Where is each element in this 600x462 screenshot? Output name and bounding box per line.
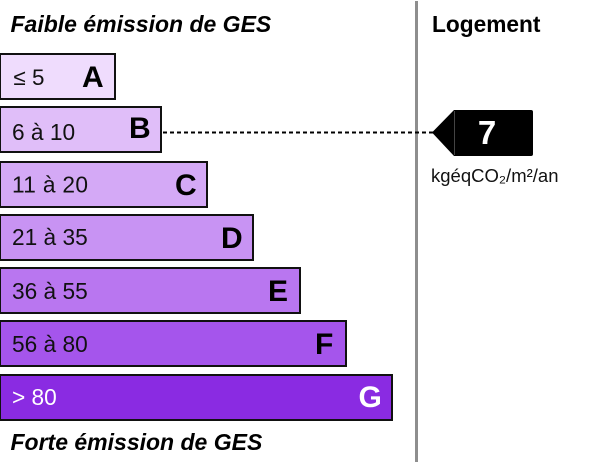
bar B: 6 à 10: [12, 119, 75, 145]
heading: high emissions: Forte émission de GES: [10, 429, 263, 455]
bar E: 36 à 55: [12, 278, 88, 304]
vertical divider: [415, 1, 418, 462]
bar D: D: [221, 222, 243, 255]
value arrow tag: 7: [478, 114, 496, 151]
bar C: C: [175, 169, 197, 202]
bar G: G: [358, 381, 382, 414]
bar A: [0, 54, 115, 99]
bar F: 56 à 80: [12, 331, 88, 357]
heading: housing: Logement: [432, 11, 541, 37]
value arrow tag: [432, 110, 533, 156]
bar D: 21 à 35: [12, 224, 88, 250]
bar F: [0, 321, 346, 366]
bar A: A: [82, 61, 104, 94]
bar G: > 80: [12, 384, 57, 410]
bar D: [0, 215, 253, 260]
bar F: F: [315, 328, 333, 361]
bar E: [0, 268, 300, 313]
unit label: kgéqCO₂/m²/an: [431, 165, 558, 186]
bar E: E: [268, 275, 288, 308]
bar B: [0, 107, 161, 152]
bar C: [0, 162, 207, 207]
dashed connector: [163, 132, 433, 134]
bar G: [0, 375, 392, 420]
bar C: 11 à 20: [12, 172, 88, 198]
bar A: ≤ 5: [14, 65, 44, 90]
heading: low emissions: Faible émission de GES: [10, 11, 272, 37]
bar B: B: [129, 112, 151, 145]
